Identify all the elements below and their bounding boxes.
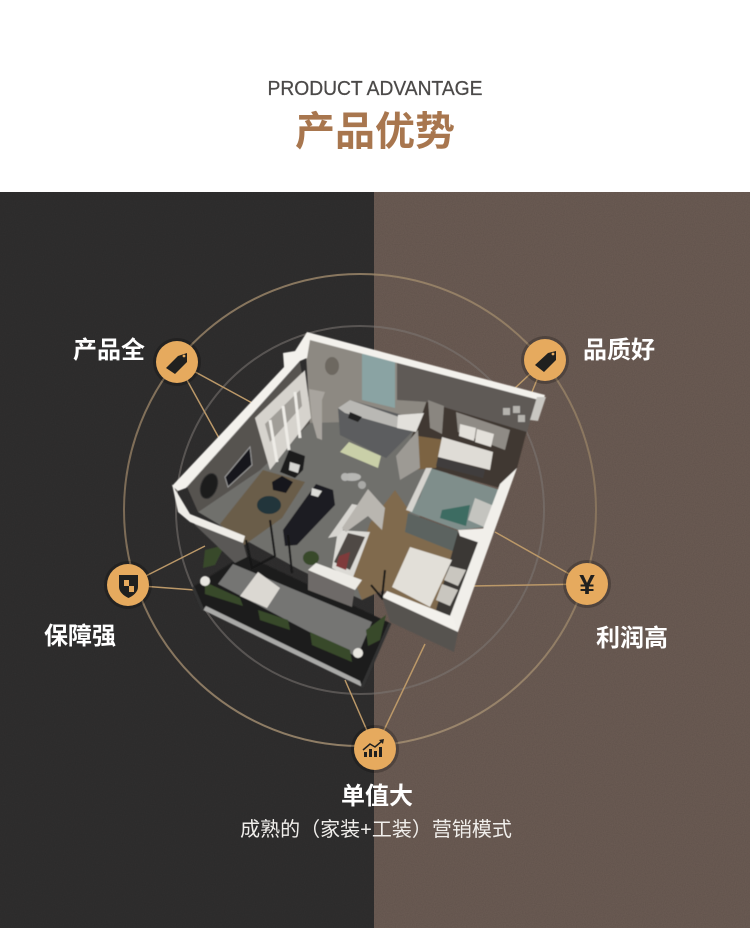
middle partition block <box>308 563 362 607</box>
badge: 单值大 <box>351 725 399 773</box>
living room and floors <box>198 400 527 618</box>
bookshelf <box>255 370 311 470</box>
glass door on back wall <box>362 350 395 408</box>
round side table <box>257 496 281 514</box>
armchair <box>280 450 305 478</box>
balcony tabletop <box>240 572 280 608</box>
storage closet <box>332 530 370 580</box>
connector lines <box>128 360 587 749</box>
badge: 品质好 <box>521 336 569 384</box>
bedroom door leaf <box>428 400 444 434</box>
bathroom <box>405 468 500 552</box>
wreath <box>197 471 221 501</box>
text: business model description: 成熟的（家装+工装）营销模式 <box>240 818 512 841</box>
left wall inner face <box>187 362 310 512</box>
badge: 保障强 <box>104 561 152 609</box>
label: 品质好: 品质好 <box>583 337 655 364</box>
top wall end cap <box>530 397 546 421</box>
kitchen counter <box>338 400 424 458</box>
coffee table <box>272 476 293 493</box>
lower-left wall <box>172 484 247 563</box>
label: 单值大: 单值大 <box>341 783 413 810</box>
bottom bedroom <box>392 532 480 618</box>
balcony lamps <box>200 576 363 658</box>
balcony sliding doors <box>246 520 385 598</box>
side shelf <box>309 389 325 440</box>
back wall <box>305 337 427 423</box>
badge: 利润高 <box>563 560 611 608</box>
heading: English title: PRODUCT ADVANTAGE <box>268 78 482 100</box>
diagram rings <box>124 274 596 746</box>
icon: price tag <box>535 351 556 372</box>
panel: two-tone background <box>0 192 750 928</box>
icon: rising bar chart <box>363 739 384 757</box>
sofa <box>283 484 335 546</box>
label: 利润高: 利润高 <box>596 625 668 652</box>
label: 保障强: 保障强 <box>44 623 116 650</box>
label: 产品全: 产品全 <box>73 337 145 364</box>
wall frames <box>503 406 525 422</box>
heading: Chinese title: 产品优势 <box>295 110 455 154</box>
top-left white wall <box>172 332 545 491</box>
balcony <box>193 556 390 687</box>
interior partition <box>396 430 420 480</box>
bedroom back wall <box>397 360 537 432</box>
round wall ornament <box>325 357 339 375</box>
floor plan illustration <box>172 332 546 687</box>
dining table <box>340 442 381 489</box>
right outer wall <box>450 468 517 632</box>
bottom bedroom wall <box>382 591 458 652</box>
badge: 产品全 <box>153 338 201 386</box>
bedroom 1 bed <box>436 412 510 478</box>
balcony planters <box>203 545 386 662</box>
icon: shield <box>119 575 138 598</box>
vanity counter and door leaf <box>328 489 385 538</box>
icon: price tag <box>166 353 187 374</box>
bedroom divider block <box>458 528 490 543</box>
icon: yen: ¥ <box>579 569 595 600</box>
TV <box>225 447 252 487</box>
